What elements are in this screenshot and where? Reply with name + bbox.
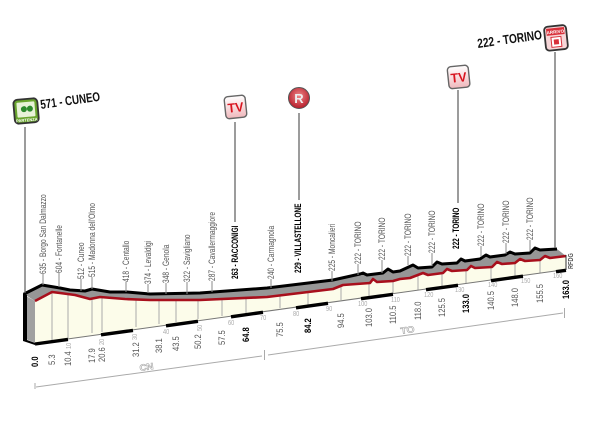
town labels: 222 - TORINO (501, 200, 511, 243)
province label: TO: TO (400, 324, 415, 336)
town labels: 374 - Levaldigi (143, 241, 153, 284)
icon: start (partenza) (13, 98, 39, 124)
distance labels: 94.5 (335, 313, 346, 328)
distance labels: 0.0 (29, 356, 40, 367)
town labels: 222 - TORINO (377, 217, 387, 260)
distance labels: 110.5 (387, 305, 398, 324)
elevation profile (23, 248, 566, 345)
town labels: 512 - Cuneo (76, 242, 86, 279)
finish title: 222 - TORINO (476, 28, 543, 51)
vertical km ticks (52, 260, 540, 340)
distance labels: 133.0 (460, 294, 471, 313)
left side face (26, 296, 35, 343)
icon: TV Racconigi: TV (227, 99, 245, 116)
town labels: 229 - VILLASTELLONE (293, 203, 303, 273)
province brackets (35, 308, 564, 389)
left black edge (23, 293, 35, 345)
km scale numbers: 150 (521, 277, 531, 285)
town labels: 287 - Cavallermaggiore (207, 212, 217, 281)
km scale numbers: 140 (488, 281, 498, 289)
icon: R circle Villastellone: R (294, 91, 304, 106)
distance labels: 17.9 (86, 348, 97, 363)
icon: R circle Villastellone (288, 88, 310, 108)
km scale numbers: 70 (260, 314, 267, 322)
distance labels: 148.0 (509, 288, 520, 307)
town labels: 222 - TORINO (525, 197, 535, 240)
distance labels: 43.5 (170, 336, 181, 351)
town labels: 348 - Genola (161, 244, 171, 283)
feed zone mark: RFDG (567, 253, 575, 269)
town labels: 635 - Borgo San Dalmazzo (38, 194, 48, 274)
km scale numbers: 100 (358, 300, 368, 308)
km scale numbers: 160 (553, 272, 563, 280)
upper town ticks (43, 240, 530, 294)
distance labels: 125.5 (436, 298, 447, 317)
icon: finish (arrivo): ARRIVO (546, 28, 565, 35)
town labels: 225 - Moncalieri (327, 224, 337, 271)
road outline (24, 248, 557, 294)
baseline km bar (35, 270, 566, 344)
distance labels: 20.6 (96, 347, 107, 362)
icon: finish (arrivo) (544, 25, 568, 51)
marker pole lines (25, 52, 555, 293)
distance labels: 38.1 (153, 338, 164, 353)
town labels: 222 - TORINO (427, 210, 437, 253)
km scale numbers: 110 (391, 296, 400, 304)
km scale numbers: 130 (455, 286, 465, 294)
distance labels: 103.0 (363, 308, 374, 327)
town labels (38, 194, 535, 284)
distance labels: 163.0 (560, 280, 571, 299)
town labels: 263 - RACCONIGI (230, 226, 240, 279)
distance labels: 5.3 (46, 354, 57, 365)
icon: TV Racconigi (224, 95, 247, 119)
distance labels: 64.8 (240, 327, 251, 342)
km scale numbers: 90 (326, 305, 333, 313)
right edge (565, 255, 567, 270)
distance labels (29, 280, 571, 367)
icon: start (partenza): PARTENZA (16, 117, 38, 123)
km scale numbers: 80 (293, 310, 300, 318)
distance labels: 50.2 (192, 334, 203, 349)
distance labels: 118.0 (412, 301, 423, 320)
town labels: 418 - Centallo (121, 240, 131, 282)
cream lower face (35, 256, 566, 344)
km scale numbers: 60 (228, 319, 235, 327)
distance labels: 84.2 (302, 318, 313, 333)
km scale numbers: 50 (196, 324, 204, 331)
distance labels: 10.4 (62, 351, 73, 366)
distance labels: 75.5 (274, 322, 285, 337)
distance labels: 31.2 (130, 342, 141, 357)
icon: TV Torino: TV (450, 69, 468, 86)
distance labels: 57.5 (216, 330, 227, 345)
icon: TV Torino (447, 65, 470, 89)
km scale numbers: 30 (131, 333, 139, 340)
gray upper band (24, 248, 566, 301)
town labels: 515 - Madonna dell'Olmo (87, 203, 97, 277)
town labels: 322 - Savigliano (182, 234, 192, 282)
town labels: 240 - Carmagnola (266, 225, 276, 279)
km scale numbers: 40 (163, 328, 170, 336)
town labels: 222 - TORINO (403, 213, 413, 256)
province label: CN: CN (139, 361, 154, 373)
town labels: 222 - TORINO (451, 208, 461, 249)
red road line (35, 256, 566, 301)
town labels: 222 - TORINO (353, 221, 363, 264)
distance labels: 140.5 (485, 291, 496, 310)
km scale numbers: 120 (424, 291, 434, 299)
start title: 571 - CUNEO (40, 91, 101, 112)
km scale numbers: 10 (65, 342, 73, 349)
town labels: 604 - Fontanelle (54, 225, 64, 273)
km scale numbers (65, 272, 563, 349)
town labels: 222 - TORINO (476, 203, 486, 246)
distance labels: 155.5 (534, 284, 545, 303)
km scale numbers: 20 (98, 338, 106, 345)
